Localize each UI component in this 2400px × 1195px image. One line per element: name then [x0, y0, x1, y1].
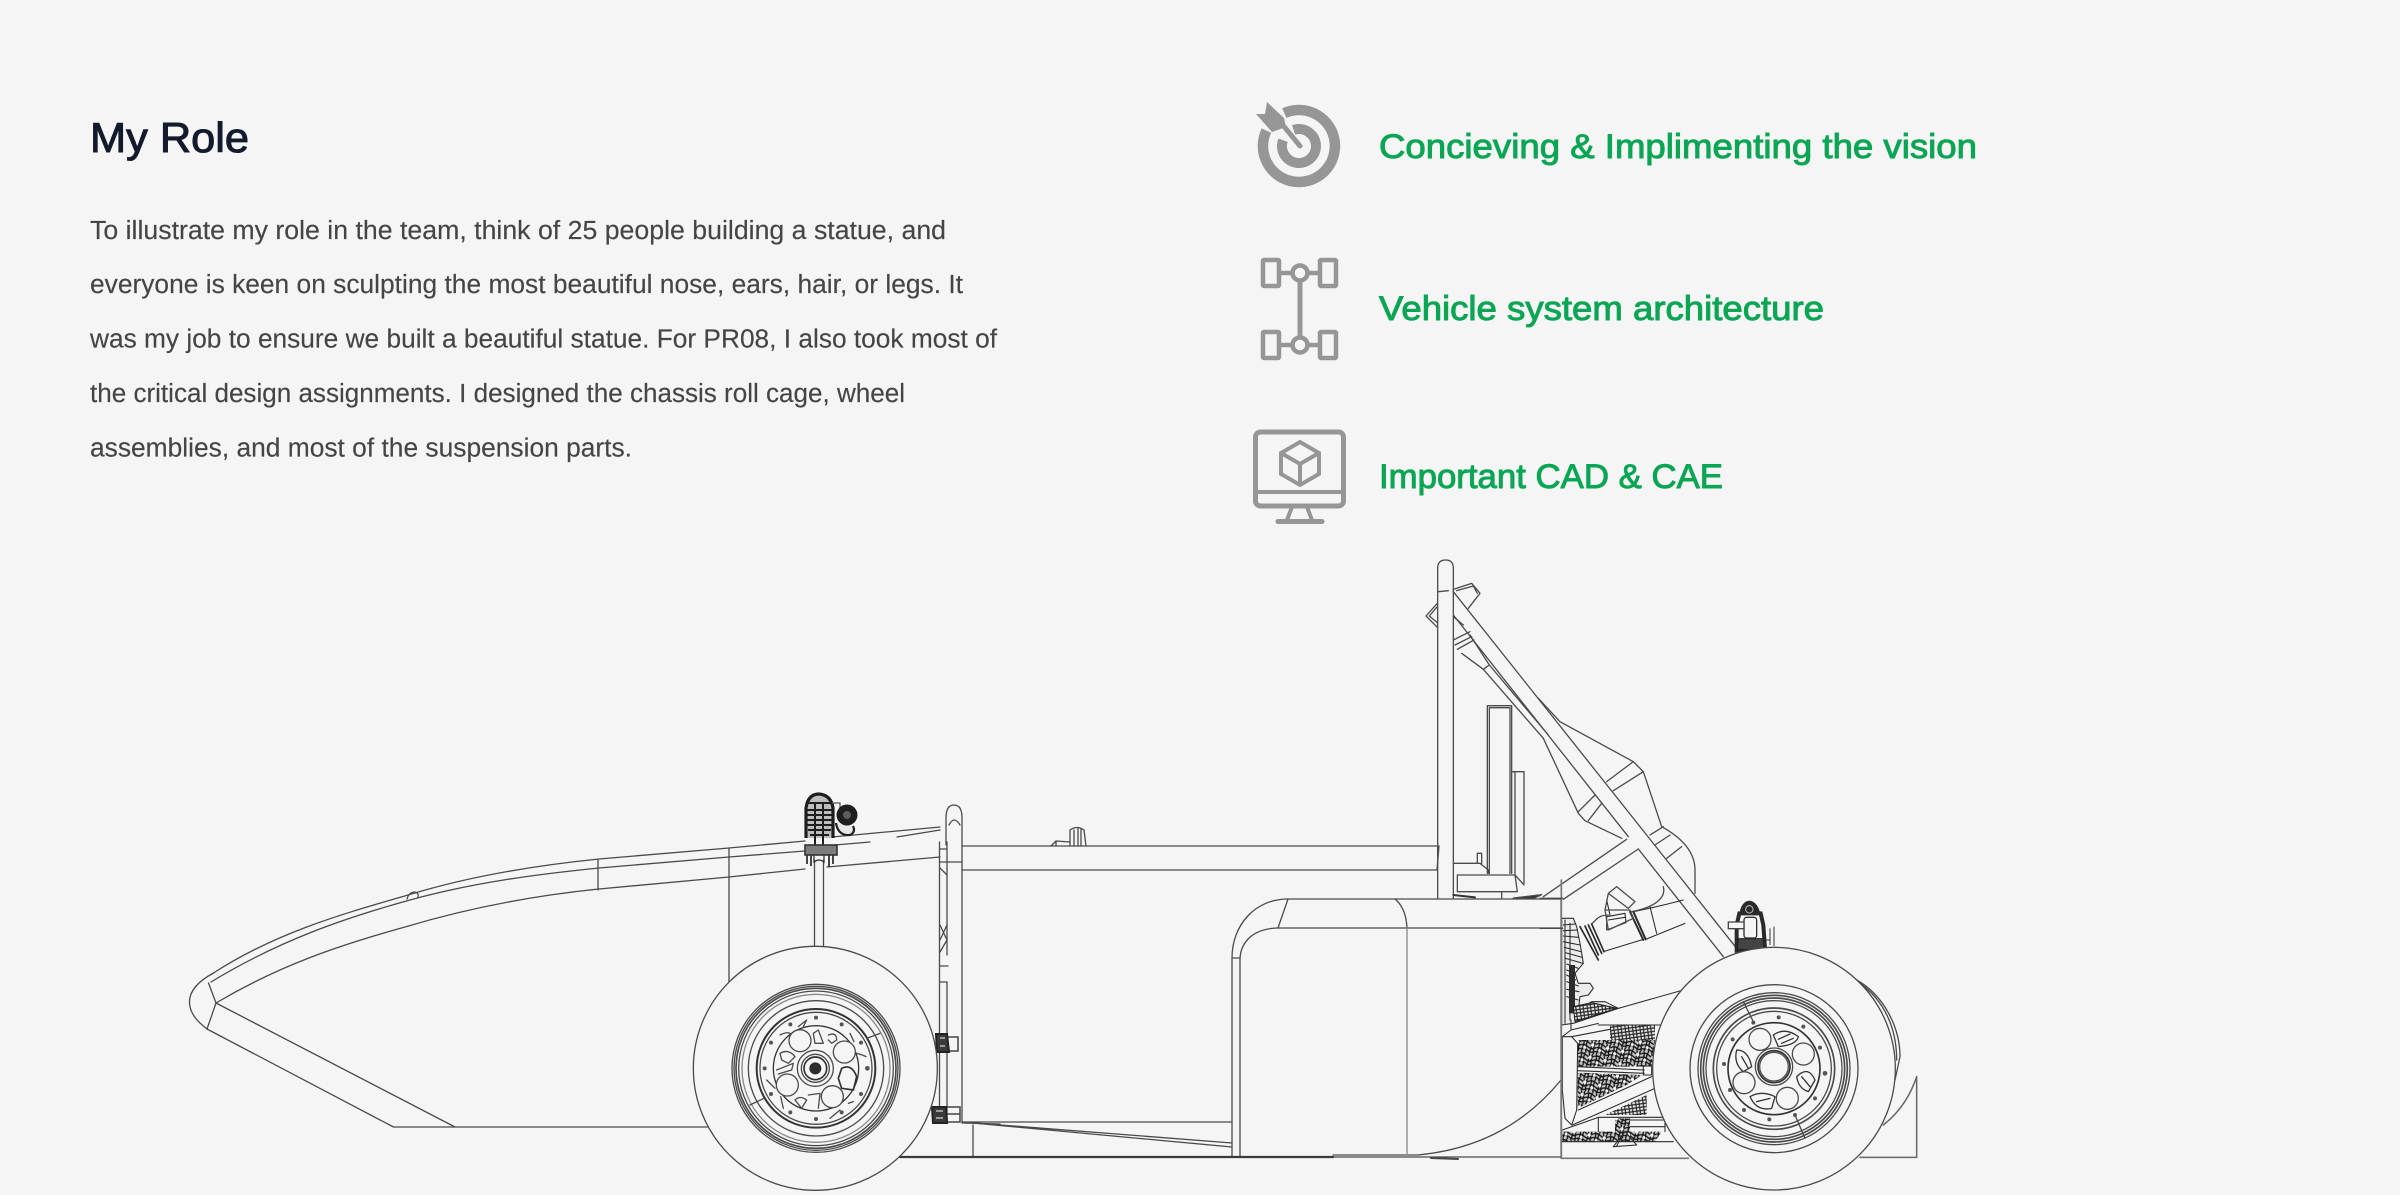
- rear wheel: [1653, 947, 1895, 1190]
- steering column: [1051, 828, 1086, 846]
- exhaust, turbo and bellows: [1562, 900, 1685, 1025]
- rear shock absorber: [1728, 901, 1774, 951]
- text block: role description: assemblies, and most of the suspension parts.: [90, 434, 632, 462]
- car line drawing: [189, 560, 1917, 1190]
- rear engine bay: [1562, 1020, 1673, 1147]
- icon: target with arrow: [1256, 102, 1335, 182]
- heading: My Role: My Role: [90, 114, 249, 161]
- text block: role description: was my job to ensure we built a beautiful statue. For PR08, I also took most of: [89, 326, 998, 354]
- text block: role description: the critical design assignments. I designed the chassis roll cage, wheel: [90, 380, 905, 408]
- label: Vehicle system architecture: Vehicle system architecture: [1379, 290, 1824, 328]
- text block: role description: everyone is keen on sculpting the most beautiful nose, ears, hair, or legs. It: [90, 271, 963, 299]
- rear bulkhead and wing: [1540, 880, 1917, 1158]
- main roll hoop, braces, intake: [1426, 560, 1737, 957]
- text block: role description: To illustrate my role in the team, think of 25 people building a statue, and: [90, 217, 946, 245]
- suspension clips: [932, 1034, 960, 1123]
- front roll hoop and bulkhead: [940, 805, 1000, 1124]
- icon: vehicle chassis: [1263, 260, 1336, 358]
- icon: monitor with cube: [1256, 432, 1344, 522]
- text block: role description: [89, 217, 998, 462]
- front shock absorber: [805, 794, 858, 867]
- label: Important CAD and CAE: Important CAD & CAE: [1379, 458, 1723, 496]
- cockpit side: [900, 846, 1561, 1159]
- front wheel: [693, 946, 937, 1190]
- label: Concieving and Implimenting the vision: Concieving & Implimenting the vision: [1379, 128, 1977, 166]
- nose cone and body panels: [189, 827, 940, 1127]
